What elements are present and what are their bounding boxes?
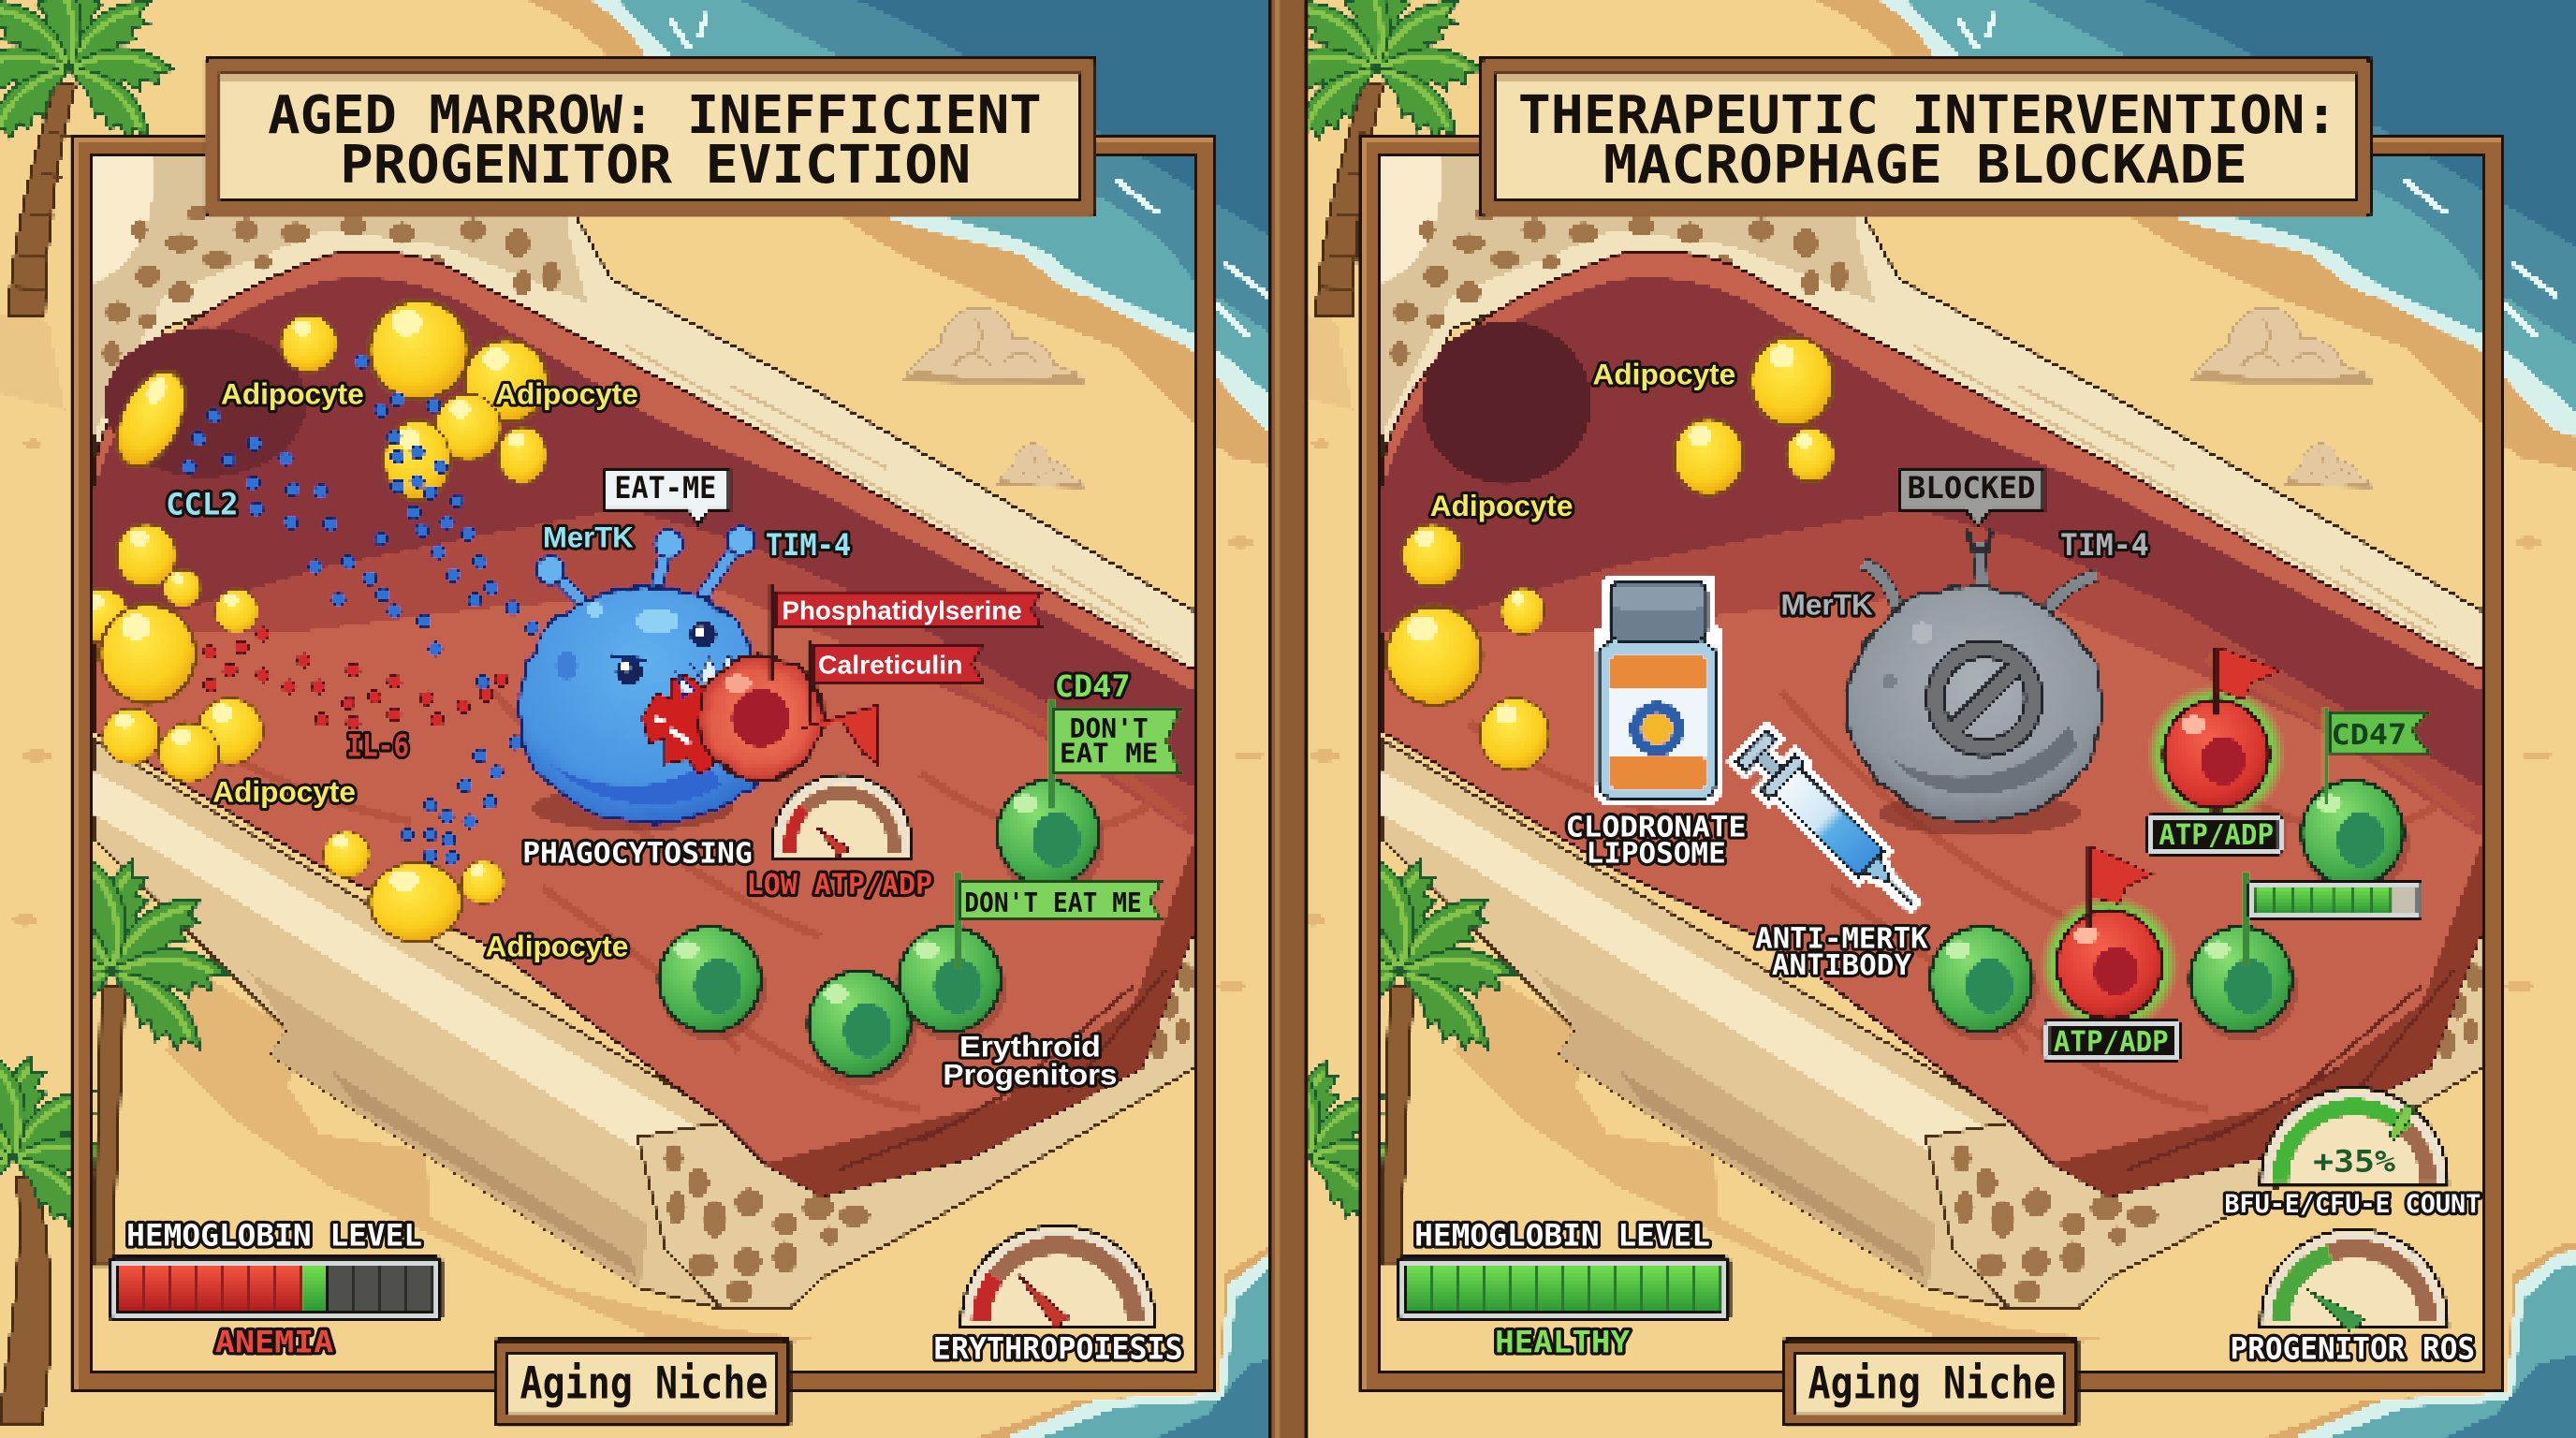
panel: therapeutic intervention (right)	[1206, 0, 2576, 1438]
labels: right marrow: BFU-E/CFU-E COUNT	[2224, 1191, 2481, 1219]
labels: left marrow: DON'T	[1070, 713, 1149, 744]
labels: right marrow: BLOCKED	[1908, 472, 2036, 506]
labels: right marrow: MerTK	[1781, 587, 1873, 621]
cell: apoptotic red progenitor being eaten	[698, 655, 879, 781]
labels: left marrow: CD47	[1055, 670, 1131, 704]
title: right: MACROPHAGE BLOCKADE	[1603, 135, 2247, 196]
flag: phosphatidylserine	[768, 585, 1042, 681]
divider between panels	[1268, 0, 1308, 1438]
labels: left marrow: Calreticulin	[818, 651, 962, 680]
labels: right marrow: ATP/ADP	[2054, 1026, 2169, 1059]
cell: erythroid progenitor	[1930, 927, 2039, 1042]
macrophage: phagocytosing blue cell	[520, 527, 768, 831]
labels: right marrow: CLODRONATE	[1566, 811, 1747, 844]
labels: left marrow: Adipocyte	[212, 774, 356, 808]
cell: rescued red progenitor with flag	[2147, 648, 2285, 823]
icon: palm tree lower-left inside frame	[93, 858, 232, 1269]
gauge: BFU-E/CFU-E count	[2261, 1088, 2448, 1186]
chemokine dots: CCL2	[183, 355, 539, 864]
labels: right marrow: Adipocyte	[1430, 489, 1573, 522]
labels: left marrow: MerTK	[543, 520, 634, 553]
speech bubble: EAT-ME	[605, 468, 729, 524]
flag: calreticulin	[807, 640, 983, 723]
labels: left marrow: Erythroid	[959, 1030, 1101, 1064]
panel text: left labels	[126, 85, 1183, 1410]
panel art: right scene	[1206, 0, 2576, 1438]
labels: right marrow: TIM-4	[2060, 529, 2149, 563]
panel text: right labels	[1414, 85, 2481, 1410]
labels: right marrow: CD47	[2331, 719, 2407, 752]
labels: left marrow: EAT ME	[1060, 738, 1158, 769]
title: left: AGED MARROW: INEFFICIENT	[268, 85, 1042, 146]
labels: right marrow: PROGENITOR ROS	[2231, 1332, 2475, 1366]
labels: left marrow: Adipocyte	[221, 377, 364, 411]
panel art: left scene	[0, 0, 1314, 1438]
labels: left marrow	[126, 377, 1183, 1366]
cell: erythroid progenitor with progress flag	[2190, 871, 2423, 1042]
speech bubble: BLOCKED	[1899, 468, 2043, 526]
gauge: low ATP/ADP	[772, 775, 912, 858]
gauge: erythropoiesis	[961, 1225, 1155, 1328]
cell: erythroid progenitor with CD47 flag	[2302, 707, 2428, 896]
plaque label: right: Aging Niche	[1808, 1358, 2056, 1410]
labels: right marrow: +35%	[2313, 1145, 2395, 1179]
title box: left	[204, 54, 1097, 218]
hemoglobin bar: anemia	[109, 1255, 444, 1323]
adipocytes	[76, 301, 547, 942]
label chip: ATP/ADP upper	[2145, 814, 2285, 856]
title: left	[268, 85, 1042, 196]
cell: rescued red progenitor with flag	[2041, 846, 2178, 1034]
cell: erythroid progenitor	[809, 971, 916, 1086]
labels: right marrow	[1414, 358, 2481, 1366]
icon: prohibition symbol	[1936, 649, 2034, 748]
labels: right marrow: LIPOSOME	[1587, 837, 1726, 870]
labels: left marrow: PHAGOCYTOSING	[522, 837, 753, 870]
title: right	[1518, 85, 2338, 196]
cell: erythroid progenitor with CD47 flag	[997, 698, 1179, 896]
macrophage: blocked grey cell	[1847, 529, 2103, 836]
chemokine dots: IL-6	[204, 627, 507, 729]
icon: palm tree lower-left outside frame	[1309, 1060, 1385, 1220]
icon: clodronate liposome bottle	[1593, 575, 1721, 805]
labels: left marrow: DON'T EAT ME	[964, 888, 1142, 918]
icon: palm tree lower-left outside frame	[0, 1051, 121, 1423]
labels: right marrow: ANTI-MERTK	[1755, 923, 1928, 956]
cell: erythroid progenitor	[659, 927, 768, 1042]
marrow cavity	[104, 327, 307, 478]
marrow cavity	[1421, 320, 1592, 485]
cell: erythroid progenitor with flag	[899, 871, 1162, 1042]
icon: palm tree top-left	[0, 0, 176, 315]
labels: right marrow: HEMOGLOBIN LEVEL	[1414, 1219, 1710, 1253]
hemoglobin bar: healthy	[1397, 1255, 1732, 1323]
labels: left marrow: LOW ATP/ADP	[747, 869, 932, 902]
plaque label: left: Aging Niche	[520, 1358, 768, 1410]
labels: right marrow: Adipocyte	[1593, 358, 1735, 391]
title: left: PROGENITOR EVICTION	[340, 135, 971, 196]
labels: left marrow: CCL2	[166, 488, 238, 521]
icon: palm tree lower-left inside frame	[1381, 858, 1520, 1266]
label chip: ATP/ADP lower	[2042, 1019, 2182, 1064]
icon: anti-MerTK syringe	[1734, 728, 1929, 921]
labels: left marrow: ERYTHROPOIESIS	[933, 1332, 1183, 1366]
adipocytes	[1386, 337, 1834, 770]
labels: left marrow: TIM-4	[766, 529, 851, 563]
gauge: progenitor ROS	[2261, 1229, 2448, 1331]
labels: left marrow: HEMOGLOBIN LEVEL	[126, 1219, 422, 1253]
labels: left marrow: IL-6	[346, 729, 409, 763]
labels: right marrow: ATP/ADP	[2159, 819, 2274, 852]
labels: left marrow: Progenitors	[943, 1057, 1117, 1091]
labels: right marrow: ANTIBODY	[1772, 949, 1911, 982]
title: right: THERAPEUTIC INTERVENTION:	[1518, 85, 2338, 146]
icon: palm tree top-left	[1269, 0, 1484, 315]
labels: left marrow: EAT-ME	[614, 472, 716, 506]
labels: left marrow: Adipocyte	[495, 377, 638, 411]
panel: aged marrow (left)	[0, 0, 1314, 1438]
labels: right marrow: HEALTHY	[1495, 1326, 1630, 1359]
labels: left marrow: ANEMIA	[215, 1326, 333, 1359]
title box: right	[1479, 54, 2372, 218]
labels: left marrow: Adipocyte	[486, 929, 628, 962]
labels: left marrow: Phosphatidylserine	[782, 596, 1022, 625]
